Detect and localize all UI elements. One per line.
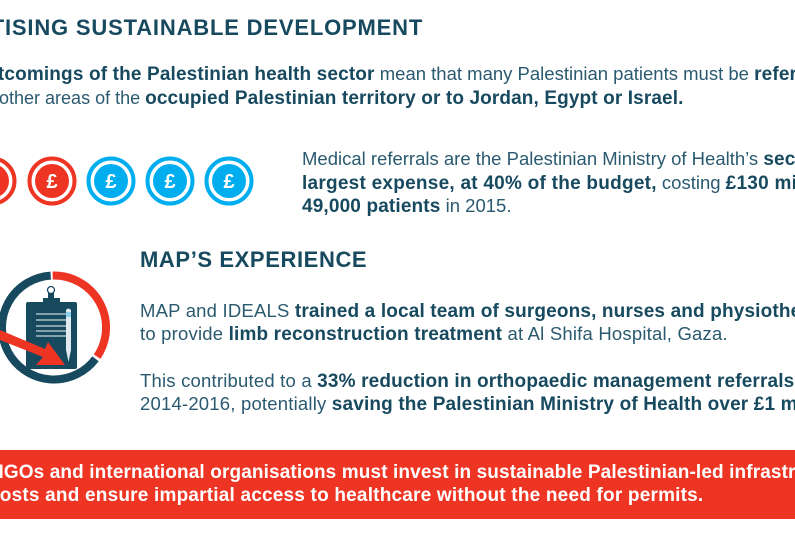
intro text: [0, 63, 795, 108]
heading: MAP's experience: MAP’S EXPERIENCE: [140, 247, 367, 272]
arrow: [0, 330, 65, 365]
ring: red segment: [53, 275, 106, 357]
icon: blue pound coin 1: £: [105, 171, 117, 193]
budget text: 49,000 patients in 2015.: [302, 195, 511, 217]
icon: pen: [66, 308, 71, 362]
icon: blue pound coin 3: £: [223, 171, 235, 193]
intro text: to other areas of the occupied Palestinian territory or to Jordan, Egypt or Israel.: [0, 88, 684, 108]
banner text: posts and ensure impartial access to healthcare without the need for permits.: [0, 485, 703, 506]
icon: red pound coin, clipped: [0, 158, 14, 204]
icon: blue pound coin 2: £: [164, 171, 176, 193]
budget text: [302, 148, 795, 217]
icon: red pound coin: [30, 158, 74, 204]
icon: red pound coin: £: [46, 171, 58, 193]
experience text: [140, 300, 795, 345]
results text: [140, 370, 795, 415]
clipboard: [26, 302, 77, 369]
icon: blue pound coin 3: [206, 158, 252, 204]
clipboard lines: [36, 314, 66, 336]
ring: navy segment: [2, 276, 96, 379]
icon: blue pound coin 1: [88, 158, 134, 204]
icon: binder clip: [43, 286, 60, 303]
icon: clipboard with downward arrow in ring: [0, 272, 110, 384]
icon: blue pound coin 2: [148, 158, 192, 204]
experience text: to provide limb reconstruction treatment at Al Shifa Hospital, Gaza.: [140, 323, 728, 345]
icon row: pound coins showing budget share: [0, 156, 254, 206]
call to action banner: [0, 450, 795, 519]
banner text: [0, 462, 795, 506]
